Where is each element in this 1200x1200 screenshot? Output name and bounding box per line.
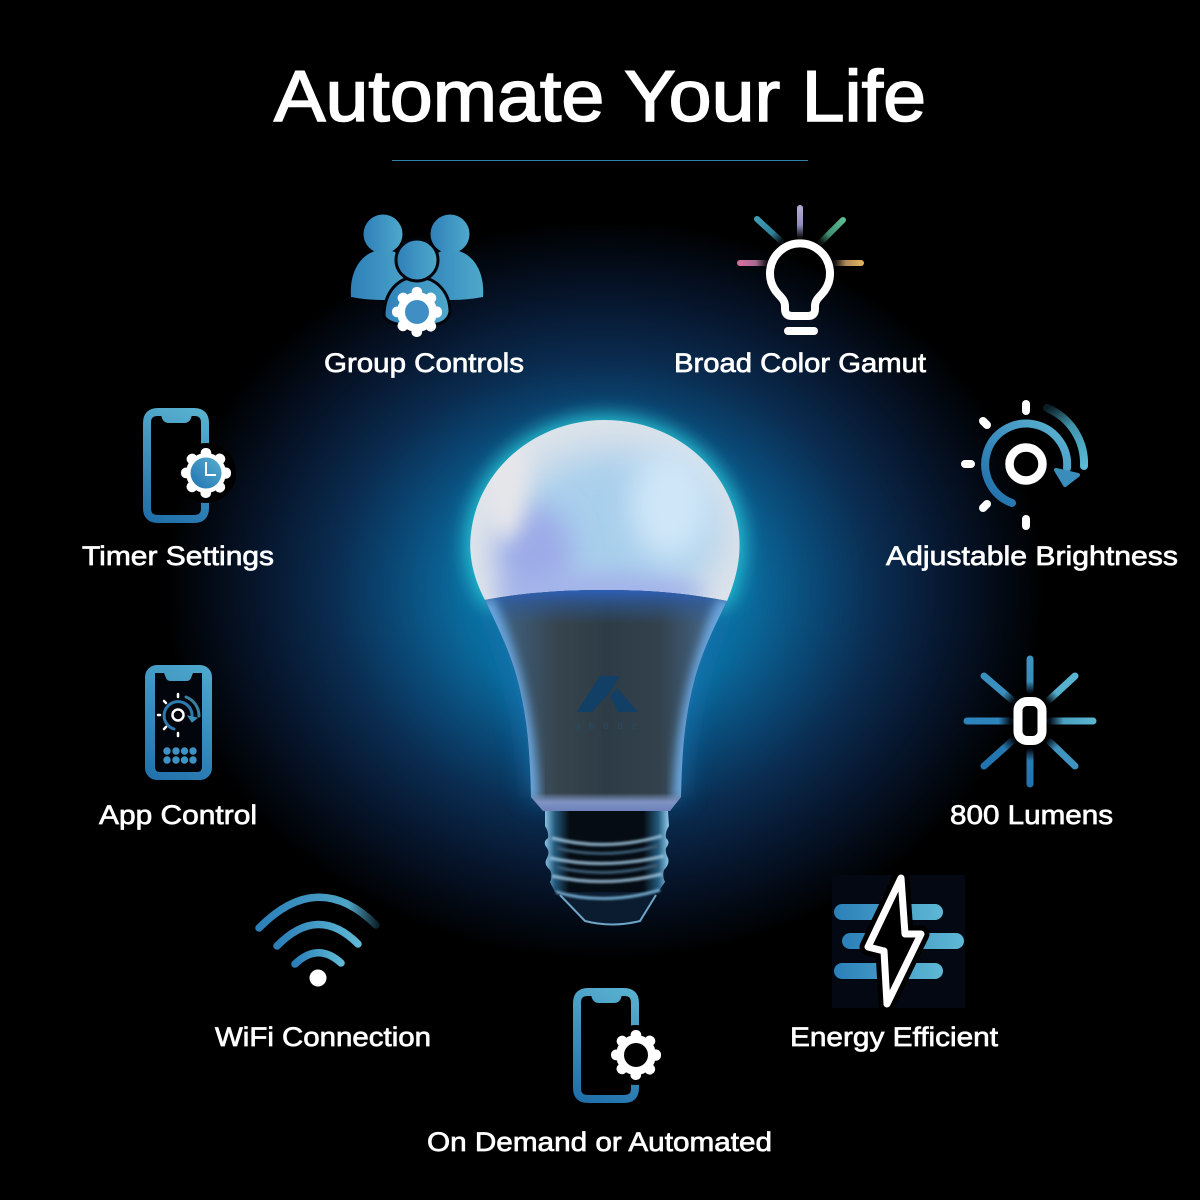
feature: 800 lumens [950,659,1113,830]
feature: app control [99,665,257,830]
label: On Demand or Automated [427,1127,772,1157]
feature: timer settings [82,412,274,571]
bulb neck [480,585,735,815]
icon: gear [397,292,437,332]
feature: group controls [324,214,524,378]
background glow [140,220,1070,960]
icon: brightness dial [965,404,1084,526]
central light bulb [460,410,750,924]
icon: zero with radiating rays [967,659,1093,784]
feature: on demand or automated [427,992,772,1157]
feature: adjustable brightness [886,404,1178,571]
bulb globe [470,420,740,601]
icon: wifi [259,897,376,986]
label: Adjustable Brightness [886,541,1178,571]
icon: lightning bolt over bars [832,875,965,1008]
label: Energy Efficient [790,1022,999,1052]
abode logo: abode [575,721,637,732]
label: Broad Color Gamut [674,348,927,378]
title divider [392,160,808,161]
label: Timer Settings [82,541,274,571]
icon: phone with gear [577,992,666,1099]
label: App Control [99,800,257,830]
feature: wifi connection [215,897,431,1052]
neck glow [485,600,727,797]
label: 800 Lumens [950,800,1113,830]
icon: group of people with gear [351,214,483,332]
label: WiFi Connection [215,1022,431,1052]
icon: light bulb with coloured rays [740,208,861,331]
icon: phone with dial and app grid [145,665,212,780]
bulb halo [470,420,740,601]
screw base [545,811,669,924]
feature: energy efficient [790,875,999,1052]
label: Group Controls [324,348,524,378]
icon: phone with clock gear [147,412,236,519]
abode logo [575,676,638,732]
feature: broad color gamut [674,208,927,378]
title: Automate Your Life [274,57,926,137]
